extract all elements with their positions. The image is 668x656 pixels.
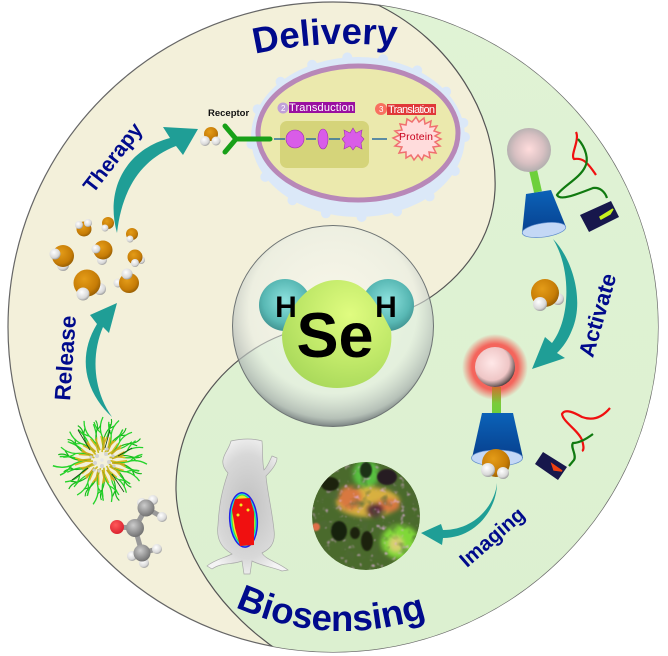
step 2 label: Transduction (289, 102, 354, 114)
spectrum curves, activated (562, 408, 610, 466)
label: therapy: Therapy (79, 118, 148, 197)
arrow: release (86, 303, 117, 417)
detector card, dim signal (580, 201, 619, 232)
ketone donor molecule (110, 495, 167, 568)
spectrum curves, quenched (557, 132, 607, 198)
step 3 label: 3 (379, 105, 384, 114)
step 3 label: Translation (388, 104, 435, 116)
signal shape: star (342, 128, 364, 150)
heading: Delivery: Delivery (252, 18, 398, 54)
label H right: H (375, 291, 397, 324)
label: release: Release (50, 315, 81, 401)
label: imaging: Imaging (455, 503, 530, 572)
icon: activated probe (462, 334, 528, 479)
icon: free H2Se molecule (531, 279, 564, 311)
nanoparticle micelle (52, 417, 148, 506)
protein burst (393, 117, 441, 160)
micrograph (312, 460, 420, 570)
step 2 label: 2 (281, 104, 286, 113)
mouse with bioluminescence (207, 439, 288, 574)
signal arrows (274, 138, 387, 140)
arrow: activate (532, 239, 577, 369)
heading: Biosensing: Biosensing (237, 584, 425, 631)
glass sphere (232, 226, 434, 426)
text: protein: Protein (399, 131, 433, 143)
green half of the yin-yang (176, 0, 668, 656)
label H left: H (275, 291, 297, 324)
arrow: imaging (421, 483, 497, 545)
arrow: therapy (114, 127, 198, 233)
label: receptor: Receptor (208, 108, 249, 119)
icon: H2Se molecule at receptor (200, 127, 220, 146)
central H2Se sphere (232, 226, 434, 426)
signal shape: ellipse (318, 129, 328, 149)
icon: quenched probe (507, 128, 567, 240)
label: activate: Activate (574, 271, 621, 360)
hydrogen right (362, 279, 414, 331)
panel: cell signalling diagram (208, 57, 465, 217)
signal shape: circle (286, 130, 304, 148)
released molecules (50, 217, 145, 300)
receptor (225, 126, 270, 152)
detector card, strong signal (535, 452, 567, 480)
selenium atom (282, 280, 391, 388)
cell membrane (258, 66, 458, 200)
transduction box (280, 121, 369, 168)
heat map signal (227, 491, 260, 549)
hydrogen left (259, 279, 311, 331)
label Se: Se (296, 301, 374, 371)
cell halo (251, 57, 465, 217)
